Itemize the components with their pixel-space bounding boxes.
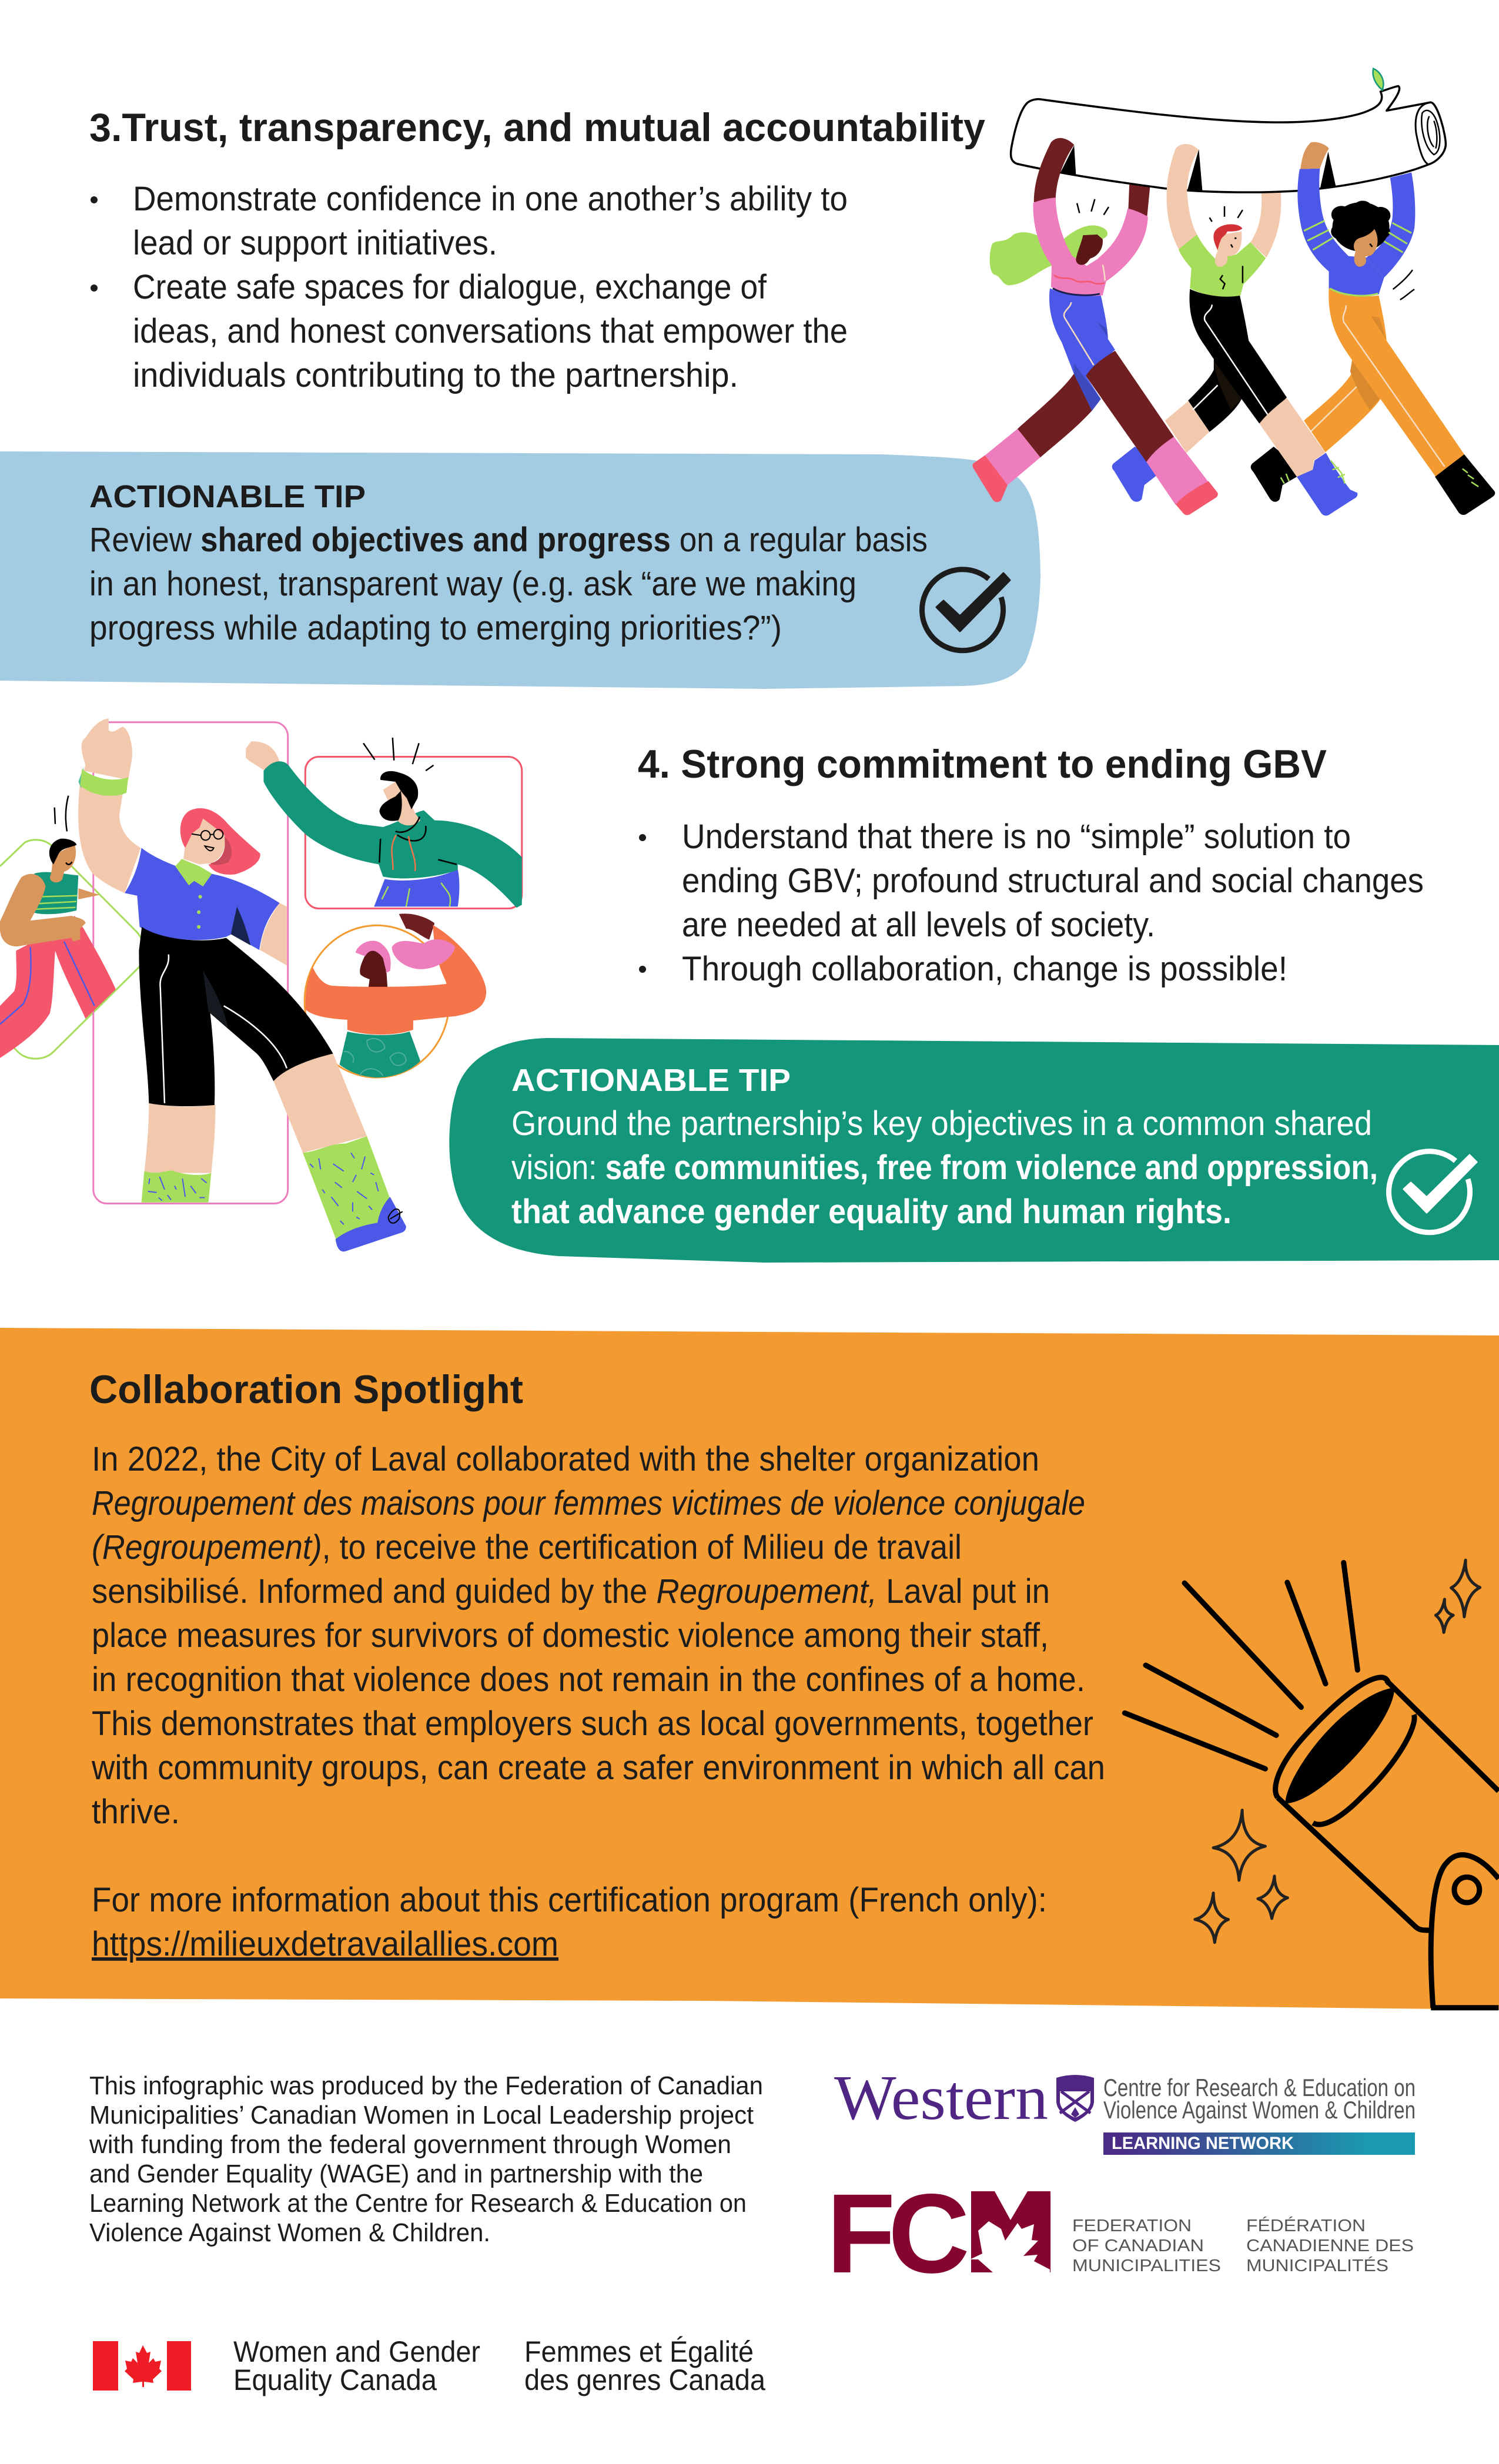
text: Women and Gender Equality Canada wordmark: Femmes et Égalité	[524, 2335, 754, 2368]
text block: spotlight story: place measures for survivors of domestic violence among their staff,	[92, 1616, 1049, 1655]
icon: check mark tip 1	[922, 570, 1010, 651]
text block: spotlight story: For more information about this certification program (French only):	[92, 1881, 1047, 1919]
person: central woman, blue shirt	[78, 718, 406, 1251]
log	[1011, 69, 1446, 192]
rays	[1125, 1563, 1357, 1769]
logo: FCM: CANADIENNE DES	[1246, 2237, 1414, 2255]
illustration: four people in frames	[0, 718, 522, 1251]
icon: Western shield	[1056, 2075, 1094, 2122]
text block: credits: and Gender Equality (WAGE) and in partnership with the	[89, 2160, 703, 2188]
text: Women and Gender Equality Canada wordmark: Equality Canada	[233, 2363, 437, 2396]
text block: spotlight story: in recognition that violence does not remain in the confines of a home.	[92, 1660, 1085, 1699]
tip 2 text: ACTIONABLE TIP	[511, 1063, 791, 1098]
text block: section 3 bullets	[91, 180, 848, 394]
learning network bar: LEARNING NETWORK	[1112, 2134, 1294, 2153]
text block: section 3 bullets: Demonstrate confidence in one another’s ability to	[133, 180, 848, 218]
text block: credits: This infographic was produced by the Federation of Canadian	[89, 2071, 763, 2100]
tip 2 text	[511, 1063, 1378, 1231]
FCM letter M with maple leaf	[970, 2191, 1050, 2272]
text block: section 4 bullets	[639, 818, 1424, 988]
text: Women and Gender Equality Canada wordmark: Women and Gender	[233, 2335, 480, 2368]
text block: credits	[89, 2071, 763, 2247]
logo: FCM: FÉDÉRATION	[1246, 2216, 1366, 2235]
logo: FCM: FEDERATION	[1072, 2217, 1192, 2235]
logo: Western University Learning Network: Violence Against Women & Children	[1103, 2096, 1416, 2124]
text: Women and Gender Equality Canada wordmark	[233, 2335, 765, 2396]
person: right, orange pants	[1251, 142, 1495, 515]
text block: spotlight story	[91, 1440, 1105, 1963]
text block: credits: Municipalities’ Canadian Women in Local Leadership project	[89, 2101, 754, 2130]
text block: section 3 bullets: individuals contributing to the partnership.	[133, 356, 738, 394]
text block: section 3 bullets: Create safe spaces for dialogue, exchange of	[133, 268, 767, 306]
logo: Western University Learning Network	[834, 2063, 1416, 2155]
text block: section 3 bullets: lead or support initiatives.	[133, 224, 497, 262]
text: Women and Gender Equality Canada wordmark: des genres Canada	[524, 2363, 765, 2396]
learning network bar	[1103, 2132, 1415, 2155]
text block: credits: with funding from the federal government through Women	[89, 2130, 731, 2159]
panel: collaboration spotlight	[0, 1328, 1499, 2010]
logo: FCM	[827, 2170, 1414, 2296]
text block: spotlight story: https://milieuxdetravailallies.com	[92, 1925, 558, 1963]
text block: spotlight story: with community groups, can create a safer environment in which all can	[91, 1749, 1105, 1787]
icon: check mark tip 2	[1389, 1151, 1477, 1233]
text block: section 4 bullets: ending GBV; profound structural and social changes	[682, 862, 1424, 900]
text block: spotlight story: thrive.	[92, 1793, 180, 1831]
text block: spotlight story: sensibilisé. Informed and guided by the Regroupement, Laval put in	[92, 1572, 1050, 1611]
illustration: megaphone with sparkles	[1125, 1560, 1498, 2008]
tip 1 heading: ACTIONABLE TIP	[89, 479, 366, 514]
heading: section 4: 4. Strong commitment to ending GBV	[638, 742, 1327, 786]
illustration: three people carrying a log	[972, 69, 1495, 515]
text block: spotlight story: (Regroupement), to receive the certification of Milieu de travail	[92, 1528, 962, 1566]
text block: section 3 bullets: ideas, and honest conversations that empower the	[133, 312, 848, 350]
text block: spotlight story: In 2022, the City of Laval collaborated with the shelter organization	[92, 1440, 1039, 1478]
person: left, pink sweater and blue pants	[972, 138, 1218, 515]
person: centre, black pants	[1112, 144, 1357, 515]
person: woman in orange sweater	[306, 913, 486, 1077]
tip 2 text: Ground the partnership’s key objectives in a common shared	[511, 1104, 1372, 1143]
panel: actionable tip 2	[449, 1038, 1499, 1263]
text block: section 4 bullets: Understand that there is no “simple” solution to	[682, 818, 1351, 856]
megaphone body	[1276, 1678, 1498, 2008]
text block: section 4 bullets: Through collaboration, change is possible!	[682, 950, 1287, 988]
logo: FCM: MUNICIPALITIES	[1072, 2257, 1221, 2275]
tip 1 text	[89, 521, 928, 647]
text block: spotlight story: Regroupement des maisons pour femmes victimes de violence conjugale	[92, 1484, 1085, 1522]
person: man pointing, left	[0, 796, 116, 1058]
tip 2 text: that advance gender equality and human rights.	[511, 1193, 1232, 1231]
logo: FCM: MUNICIPALITÉS	[1246, 2256, 1388, 2275]
logo: Western University Learning Network: Centre for Research & Education on	[1103, 2074, 1416, 2101]
text block: spotlight story: This demonstrates that employers such as local governments, together	[92, 1705, 1093, 1743]
panel: actionable tip 1	[0, 451, 1040, 689]
person: bearded man, green hoodie	[246, 738, 522, 908]
logo: FCM: OF CANADIAN	[1072, 2237, 1204, 2255]
logo: FCM: FCM	[827, 2170, 1058, 2296]
text block: credits: Violence Against Women & Children.	[89, 2218, 490, 2247]
tip 2 text: vision: safe communities, free from violence and oppression,	[511, 1149, 1378, 1187]
heading: section 3: 3.Trust, transparency, and mutual accountability	[89, 105, 985, 150]
frames	[0, 722, 522, 1204]
heading: collaboration spotlight: Collaboration Spotlight	[89, 1367, 523, 1412]
logo: Western University Learning Network: Western	[834, 2063, 1048, 2133]
logo: Canadian flag	[93, 2341, 191, 2391]
text block: credits: Learning Network at the Centre for Research & Education on	[89, 2189, 747, 2218]
tip 1 text: progress while adapting to emerging priorities?”)	[89, 609, 782, 647]
tip 1 text: Review shared objectives and progress on a regular basis	[89, 521, 928, 559]
sparkles	[1195, 1560, 1480, 1943]
text block: section 4 bullets: are needed at all levels of society.	[682, 906, 1155, 944]
tip 1 text: in an honest, transparent way (e.g. ask “are we making	[89, 565, 856, 603]
right arms behind the log	[1128, 172, 1415, 277]
